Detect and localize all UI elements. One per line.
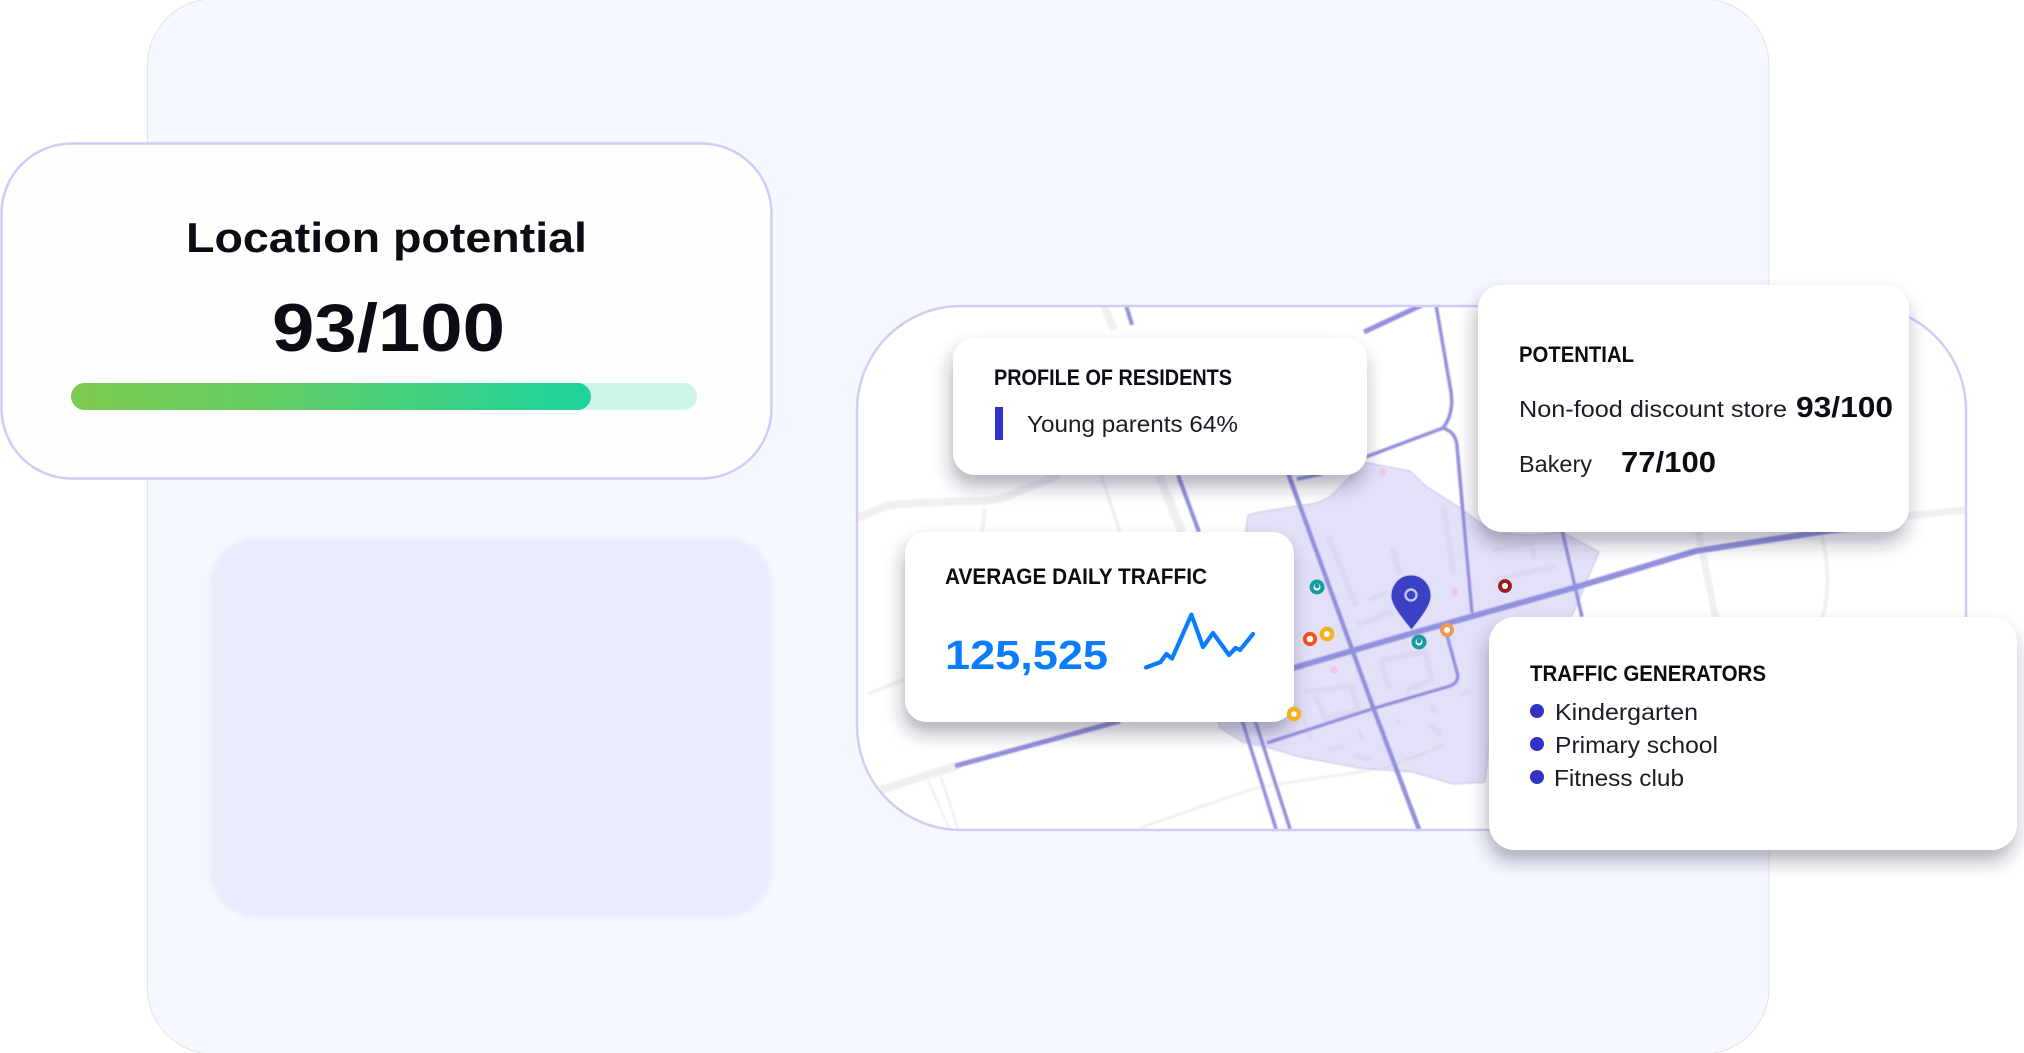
marker: orange-red bbox=[1305, 634, 1315, 644]
value: 125,525 bbox=[945, 632, 1108, 678]
panel: location potential bbox=[2, 144, 772, 478]
score: 93/100: 93/100 bbox=[272, 290, 505, 366]
heading: POTENTIAL bbox=[1519, 342, 1634, 367]
marker: teal bbox=[1312, 582, 1322, 592]
map border bbox=[857, 306, 1966, 830]
heading: TRAFFIC GENERATORS bbox=[1530, 661, 1766, 686]
legend bar bbox=[995, 407, 1003, 440]
heading: location potential: Location potential bbox=[186, 214, 587, 261]
purple main roads bbox=[955, 305, 1880, 832]
catchment area polygon bbox=[1217, 462, 1599, 784]
map markers bbox=[1305, 468, 1510, 674]
list: primary school: Primary school bbox=[1555, 732, 1718, 758]
progress bar bbox=[71, 383, 697, 410]
score: 77/100: 77/100 bbox=[1621, 447, 1716, 479]
card: average daily traffic bbox=[905, 532, 1294, 722]
card: traffic generators bbox=[1489, 617, 2017, 850]
card: potential bbox=[1478, 285, 1909, 532]
marker: teal lower bbox=[1414, 636, 1424, 648]
marker: orange bbox=[1442, 625, 1452, 635]
row: bakery: Bakery bbox=[1519, 451, 1592, 477]
value: Young parents 64% bbox=[1027, 411, 1238, 437]
map roads and catchment area bbox=[857, 305, 1966, 832]
score: 93/100: 93/100 bbox=[1796, 392, 1893, 424]
gray background roads bbox=[857, 305, 1966, 832]
panel: map bbox=[857, 305, 1966, 832]
row: non-food discount store: Non-food discount store bbox=[1519, 396, 1787, 422]
marker: dark red bbox=[1500, 581, 1510, 591]
list: fitness club: Fitness club bbox=[1554, 765, 1684, 791]
heading: PROFILE OF RESIDENTS bbox=[994, 365, 1232, 390]
marker: pink faint bbox=[1330, 468, 1459, 674]
building blocks bbox=[1382, 744, 1444, 769]
marker: yellow bbox=[1322, 629, 1332, 639]
marker: yellow on card edge bbox=[1289, 709, 1299, 719]
blurred placeholder panel bbox=[210, 538, 772, 917]
list: kindergarten: Kindergarten bbox=[1555, 699, 1698, 725]
heading: AVERAGE DAILY TRAFFIC bbox=[945, 564, 1207, 589]
icon: location pin bbox=[1391, 575, 1431, 630]
sparkline bbox=[1146, 615, 1253, 668]
card: profile of residents bbox=[953, 338, 1367, 475]
